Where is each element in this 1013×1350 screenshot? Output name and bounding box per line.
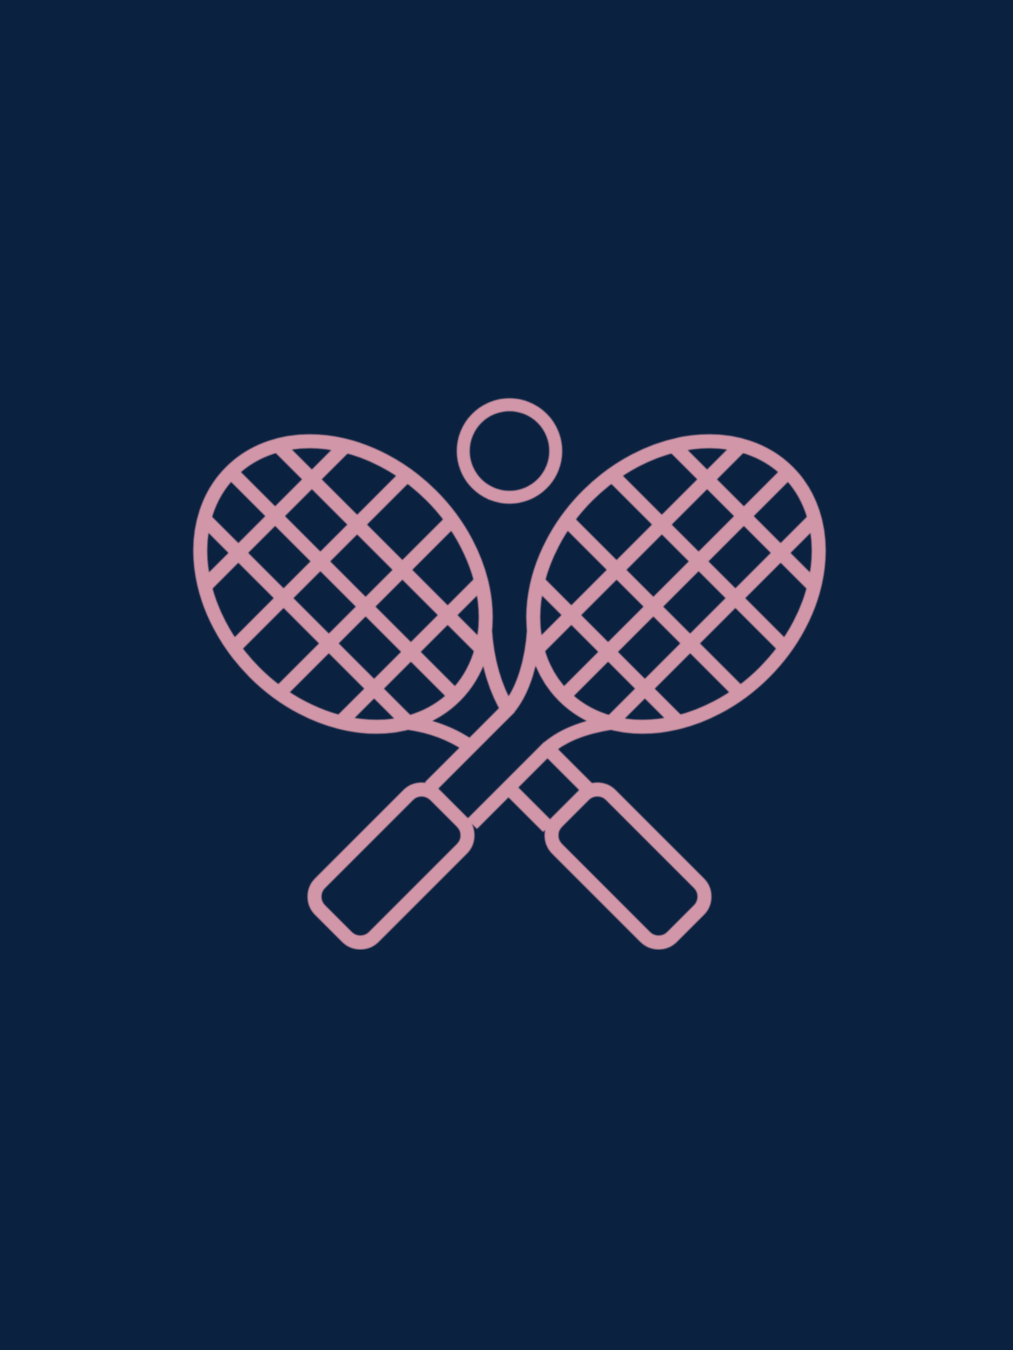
right racket shaft [430,707,549,824]
left racket shaft [512,750,587,827]
left racket head [192,434,494,734]
icon: right racket [306,434,826,950]
right racket head [526,434,826,734]
panel: crossed tennis rackets icon on navy background [192,398,826,950]
left racket throat [409,630,508,745]
icon: left racket [143,384,712,950]
right racket throat [508,630,610,750]
left racket grip [544,782,712,950]
icon: tennis ball [463,405,556,497]
right racket grip [307,782,475,950]
